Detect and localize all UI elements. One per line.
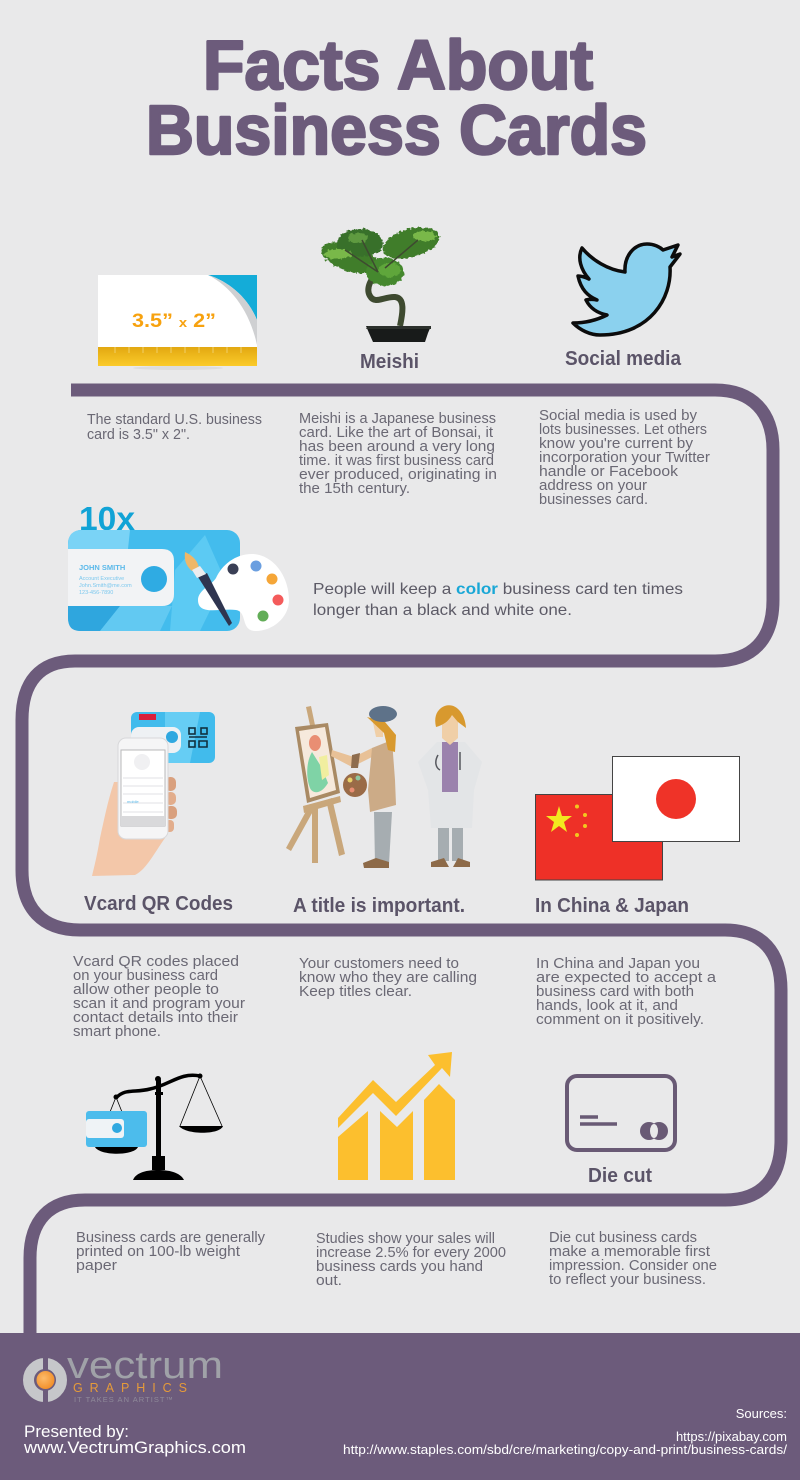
painter	[331, 748, 376, 767]
text: Meishi description: card. Like the art of Bonsai, it	[299, 425, 493, 441]
text: Vcard description: on your business card	[73, 968, 218, 984]
icon: die cut card	[567, 1076, 675, 1150]
text: colour card fact	[313, 581, 683, 619]
text: Meishi description: the 15th century.	[299, 481, 410, 497]
title	[146, 26, 647, 169]
title: Facts About	[203, 26, 593, 104]
text: social media description	[539, 408, 710, 508]
logo: Vectrum Graphics: IT TAKES AN ARTIST™	[74, 1395, 173, 1404]
text: title description	[299, 956, 477, 1000]
text: paper weight: Business cards are generally	[76, 1230, 266, 1246]
text: title description: Keep titles clear.	[299, 984, 412, 1000]
text: social media description: incorporation your Twitter	[539, 450, 710, 466]
logo: Vectrum Graphics	[28, 1345, 223, 1404]
icon: colour card with palette	[68, 500, 289, 631]
text: die cut description: to reflect your business.	[549, 1272, 706, 1288]
icon: phone scanning QR card	[92, 712, 215, 876]
text: sales study	[316, 1231, 506, 1289]
text: sources: Sources:	[736, 1406, 787, 1421]
text: Meishi description: has been around a very long	[299, 439, 495, 455]
doctor	[418, 742, 482, 828]
icon: rising chart	[338, 1052, 455, 1180]
icon: colour card with palette: JOHN SMITH	[79, 563, 125, 572]
text: sales study: business cards you hand	[316, 1259, 483, 1275]
text: social media description: handle or Facebook	[539, 464, 679, 480]
icon: business card size	[98, 275, 257, 370]
text: Vcard description: contact details into their	[73, 1010, 238, 1026]
text: title description: know who they are calling	[299, 970, 477, 986]
heading: Vcard QR Codes: Vcard QR Codes	[84, 893, 233, 915]
text: sales study: out.	[316, 1273, 342, 1289]
icon: bonsai tree	[317, 222, 443, 342]
text: Vcard description: allow other people to	[73, 982, 219, 998]
icon: colour card with palette: John.Smith@me.com	[79, 583, 132, 589]
icon: China and Japan flags	[536, 756, 740, 880]
text: China and Japan description: In China and Japan you	[536, 956, 700, 972]
text: presented by: Presented by:	[24, 1422, 129, 1441]
text: title description: Your customers need to	[299, 956, 459, 972]
text: Meishi description: ever produced, originating in	[299, 467, 497, 483]
text: social media description: know you're current by	[539, 436, 694, 452]
text: die cut description	[549, 1230, 717, 1288]
text: social media description: lots businesses. Let others	[539, 422, 707, 438]
text: Vcard description: Vcard QR codes placed	[73, 954, 239, 970]
logo: Vectrum Graphics: vectrum	[67, 1345, 223, 1387]
easel	[286, 706, 345, 863]
icon: business card size: 3.5” x 2”	[132, 311, 216, 332]
text: social media description: Social media is used by	[539, 408, 698, 424]
text: Meishi description: Meishi is a Japanese business	[299, 411, 496, 427]
text: Vcard description: smart phone.	[73, 1024, 161, 1040]
text: die cut description: make a memorable first	[549, 1244, 710, 1260]
heading: A title is important: A title is important.	[293, 895, 465, 917]
text: standard card size	[87, 412, 262, 443]
text: sources: http://www.staples.com/sbd/cre/marketing/copy-and-print/business-cards/	[343, 1442, 787, 1457]
text: presented by: www.VectrumGraphics.com	[23, 1438, 246, 1457]
heading: In China and Japan: In China & Japan	[535, 895, 689, 917]
text: China and Japan description: business card with both	[536, 984, 694, 1000]
text: social media description: address on your	[539, 478, 647, 494]
text: China and Japan description: hands, look at it, and	[536, 998, 678, 1014]
text: die cut description: Die cut business cards	[549, 1230, 697, 1246]
text: sales study: Studies show your sales will	[316, 1231, 495, 1247]
text: sources: https://pixabay.com	[676, 1429, 787, 1444]
heading: Meishi: Meishi	[360, 351, 419, 373]
text: Vcard description: scan it and program your	[73, 996, 245, 1012]
text: Vcard description	[73, 954, 245, 1040]
title: Business Cards	[146, 91, 647, 169]
icon: scale with business card	[86, 1074, 223, 1180]
icon: colour card with palette: 123-456-7890	[79, 590, 113, 596]
text: colour card fact: People will keep a color business card ten times	[313, 581, 683, 598]
text: colour card fact: longer than a black and white one.	[313, 602, 572, 619]
text: presented by	[23, 1422, 246, 1457]
icon: painter and doctor	[286, 705, 482, 868]
text: social media description: businesses card.	[539, 492, 648, 508]
heading: Social media: Social media	[565, 348, 682, 370]
icon: phone scanning QR card: mobile	[127, 799, 140, 804]
text: Meishi description	[299, 411, 497, 497]
text: paper weight	[76, 1230, 266, 1274]
text: standard card size: card is 3.5" x 2".	[87, 427, 190, 443]
footer band	[0, 1333, 800, 1480]
icon: twitter bird	[573, 244, 680, 335]
text: China and Japan description	[536, 956, 717, 1028]
text: standard card size: The standard U.S. business	[87, 412, 262, 428]
text: China and Japan description: are expected to accept a	[536, 970, 717, 986]
text: die cut description: impression. Consider one	[549, 1258, 717, 1274]
winding path connector	[22, 390, 781, 1335]
text: paper weight: paper	[76, 1258, 117, 1274]
heading: Die cut: Die cut	[588, 1165, 652, 1187]
text: paper weight: printed on 100-lb weight	[76, 1244, 240, 1260]
text: China and Japan description: comment on it positively.	[536, 1012, 704, 1028]
icon: colour card with palette: 10x	[79, 500, 136, 537]
icon: colour card with palette: Account Executive	[79, 576, 124, 582]
logo: Vectrum Graphics: GRAPHICS	[73, 1381, 187, 1395]
text: sources	[343, 1406, 787, 1457]
text: sales study: increase 2.5% for every 2000	[316, 1245, 506, 1261]
text: Meishi description: time. it was first business card	[299, 453, 494, 469]
